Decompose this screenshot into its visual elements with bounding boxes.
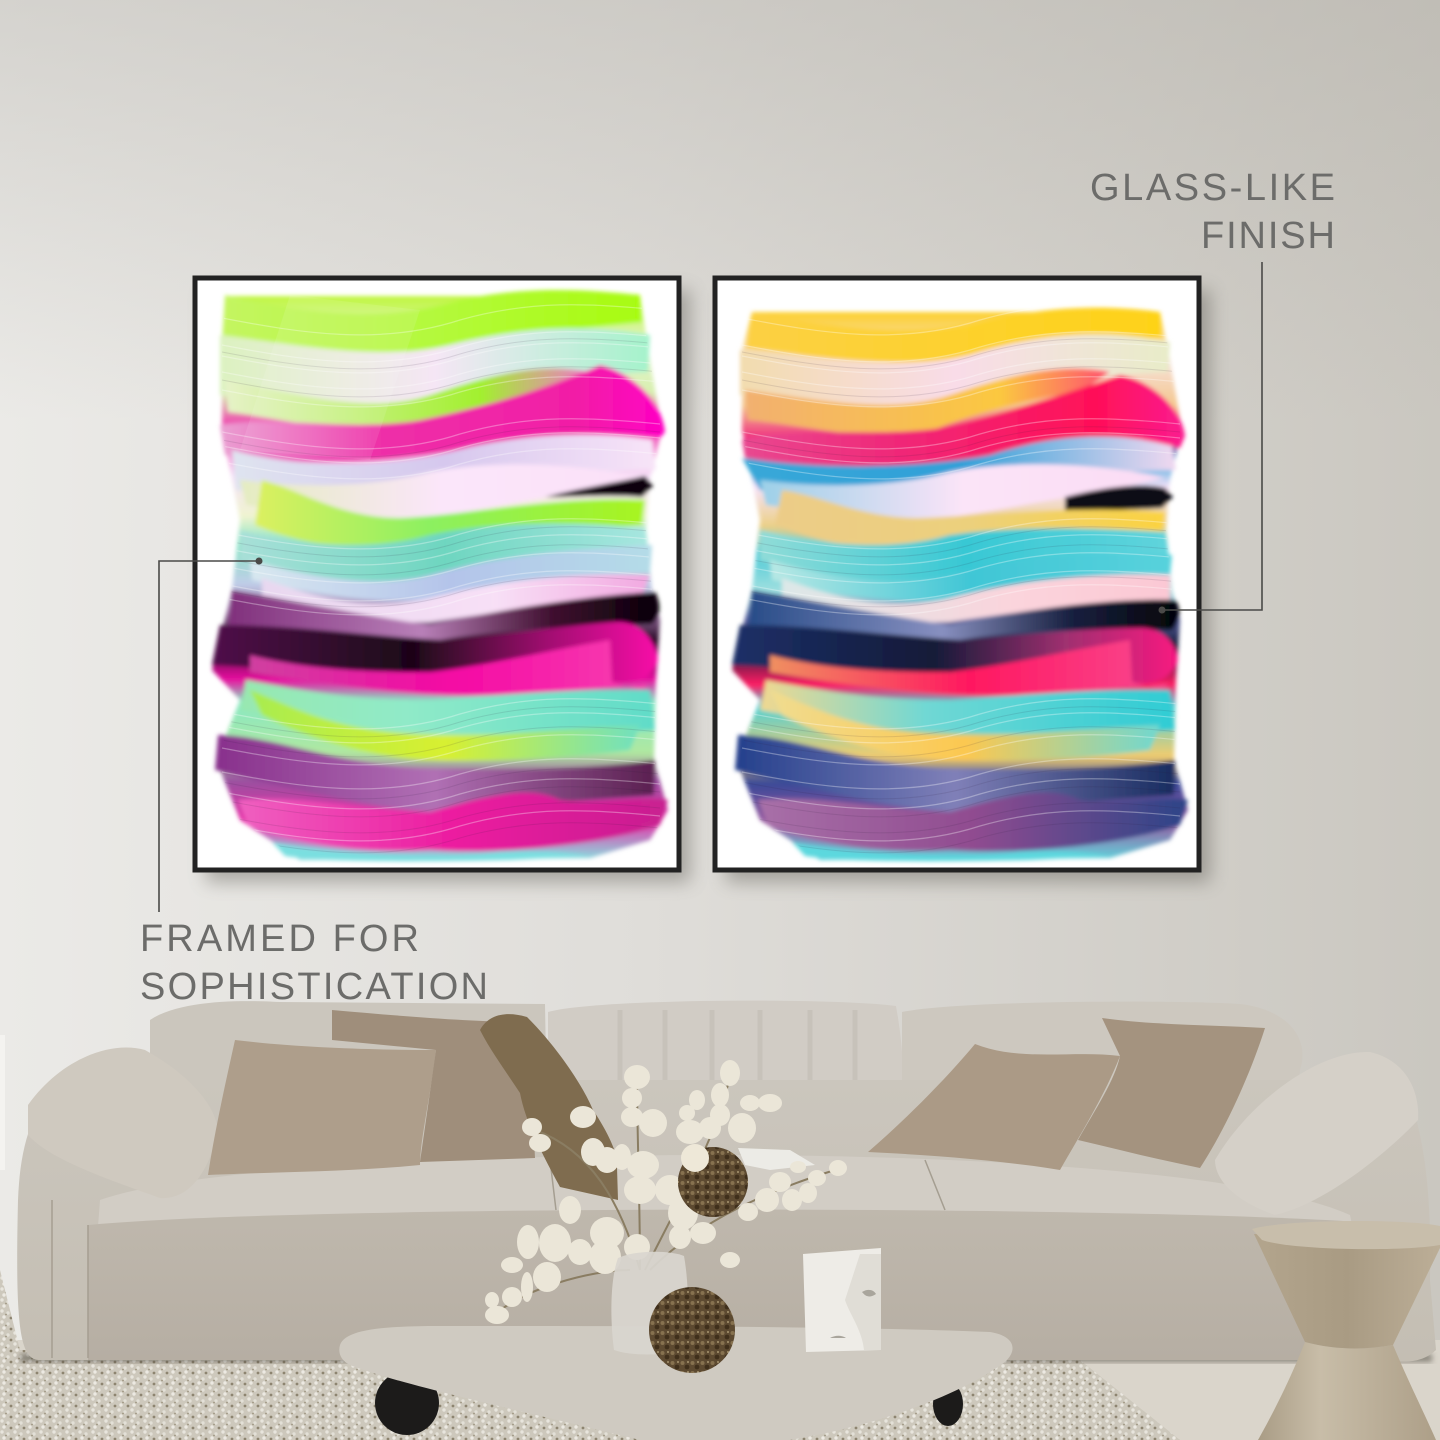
- sofa: [17, 1001, 1436, 1362]
- frame: [715, 278, 1199, 870]
- right arm throw: [1215, 1052, 1418, 1215]
- brush strokes: [732, 308, 1188, 861]
- brush strokes: [212, 290, 668, 861]
- pillow: [332, 1010, 535, 1162]
- frame: [195, 278, 679, 870]
- table legs: [375, 1371, 963, 1435]
- callout text: GLASS-LIKE: [1090, 167, 1335, 209]
- pillow: [1078, 1018, 1265, 1168]
- stool upper cone: [1254, 1234, 1440, 1348]
- glass vase: [611, 1252, 688, 1354]
- callout: framed for sophistication: [140, 558, 488, 1008]
- callout text: FINISH: [1201, 215, 1335, 257]
- sculpture: white face block: [803, 1248, 881, 1352]
- pillow: [868, 1044, 1120, 1170]
- floor and rug: [0, 1270, 1440, 1440]
- painting: left, neon palette: [195, 278, 690, 882]
- callout text: [140, 918, 488, 1008]
- flower arrangement: [480, 1014, 847, 1373]
- back cushions: [150, 1001, 548, 1170]
- stool base: [1258, 1342, 1436, 1440]
- dried hydrangea top: [678, 1147, 748, 1217]
- callout text: FRAMED FOR: [140, 918, 419, 960]
- left arm throw: [28, 1047, 218, 1198]
- brush bristle streaks: [742, 305, 1180, 853]
- painting: right, warm palette: [715, 278, 1210, 882]
- brush bristle streaks: [222, 305, 660, 853]
- stool: [1252, 1221, 1440, 1440]
- fabric folds: [620, 1010, 855, 1150]
- table top: [339, 1326, 1013, 1440]
- leaf over hydrangea: [681, 1144, 709, 1172]
- callout: glass-like finish: [1090, 167, 1335, 614]
- white book on seat: [738, 1148, 815, 1170]
- frame shadow: [726, 290, 1210, 882]
- glass reflection: [240, 295, 420, 460]
- callout leader line: [1158, 262, 1262, 614]
- callout leader line: [159, 558, 262, 912]
- callout text: [1090, 167, 1335, 257]
- callout text: SOPHISTICATION: [140, 966, 488, 1008]
- dried hydrangea bottom: [649, 1287, 735, 1373]
- pillow: [208, 1040, 436, 1175]
- coffee table: [339, 1326, 1013, 1440]
- floor shadow under sofa: [20, 1354, 1432, 1362]
- sofa base and seat: [17, 1080, 1436, 1362]
- pampas plume: [480, 1014, 618, 1200]
- stool top: [1252, 1221, 1440, 1249]
- frame shadow: [206, 290, 690, 882]
- white honesty leaves: [485, 1060, 847, 1324]
- stems: [495, 1075, 835, 1315]
